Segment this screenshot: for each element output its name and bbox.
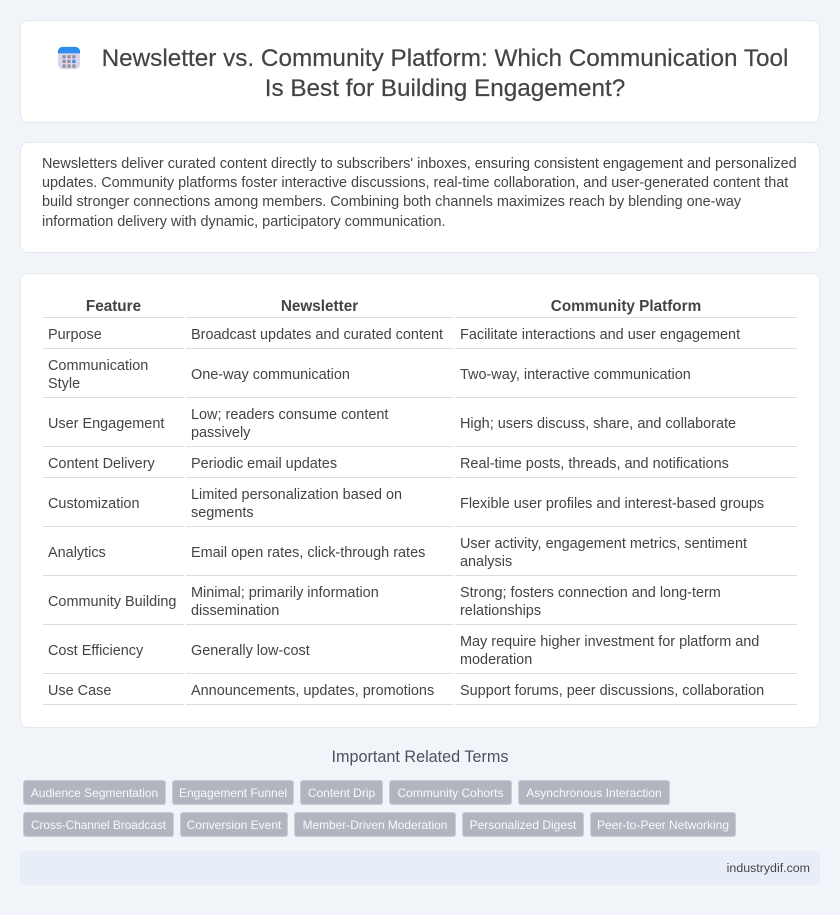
tag: Community Cohorts: [397, 786, 504, 800]
heading: related terms: Important Related Terms: [332, 748, 508, 766]
title: Is Best for Building Engagement?: [265, 75, 625, 102]
comparison table: Flexible user profiles and interest-based groups: [460, 496, 764, 512]
tag: Personalized Digest: [470, 818, 576, 832]
comparison table: Content Delivery: [48, 456, 155, 472]
tag: [23, 812, 174, 837]
tag: Member-Driven Moderation: [303, 818, 447, 832]
tag: Conversion Event: [187, 818, 281, 832]
comparison table: segments: [191, 505, 254, 521]
comparison table: User activity, engagement metrics, sentiment: [460, 536, 747, 552]
comparison table: [43, 298, 797, 705]
comparison table: Facilitate interactions and user engagement: [460, 327, 740, 343]
comparison table: Community Platform: [551, 298, 701, 315]
icon: calendar: [58, 46, 80, 70]
panel: title header: [20, 20, 820, 123]
tag: [300, 780, 383, 805]
comparison table: User Engagement: [48, 416, 164, 432]
comparison table: Limited personalization based on: [191, 487, 402, 503]
comparison table: Style: [48, 376, 80, 392]
tag: Engagement Funnel: [179, 786, 287, 800]
comparison table: Customization: [48, 496, 139, 512]
comparison table: Low; readers consume content: [191, 407, 388, 423]
comparison table: Purpose: [48, 327, 102, 343]
tag: Content Drip: [308, 786, 375, 800]
comparison table: Use Case: [48, 683, 111, 699]
footer text: industrydif.com: [727, 861, 810, 875]
panel: comparison table: [20, 273, 820, 728]
text block: introduction: Newsletters deliver curated content directly to subscribers' inboxes, ensuring consistent engagement and personalized: [42, 156, 797, 172]
comparison table: Community Building: [48, 594, 176, 610]
footer bar: [20, 851, 820, 885]
text block: introduction: [42, 156, 797, 230]
comparison table: One-way communication: [191, 367, 350, 383]
comparison table: Analytics: [48, 545, 106, 561]
tag: Asynchronous Interaction: [526, 786, 662, 800]
comparison table: dissemination: [191, 603, 279, 619]
tag: [180, 812, 288, 837]
comparison table: Cost Efficiency: [48, 643, 143, 659]
comparison table: May require higher investment for platform and: [460, 634, 759, 650]
comparison table: Communication: [48, 358, 148, 374]
comparison table: moderation: [460, 652, 532, 668]
text block: introduction: build stronger connections among members. Combining both channels maximizes reach by blending one-way: [42, 194, 741, 210]
comparison table: passively: [191, 425, 250, 441]
tag: [462, 812, 584, 837]
text block: introduction: updates. Community platforms foster interactive discussions, real-time collaboration, and user-generated content that: [42, 175, 788, 191]
tag: Audience Segmentation: [31, 786, 158, 800]
comparison table: Feature: [86, 298, 141, 315]
title: Newsletter vs. Community Platform: Which Communication Tool: [102, 45, 788, 72]
comparison table: analysis: [460, 554, 512, 570]
title: [102, 45, 788, 102]
comparison table: Newsletter: [281, 298, 358, 315]
tag: Cross-Channel Broadcast: [31, 818, 166, 832]
tag: [294, 812, 456, 837]
comparison table: Announcements, updates, promotions: [191, 683, 434, 699]
comparison table: Strong; fosters connection and long-term: [460, 585, 721, 601]
tag: [172, 780, 294, 805]
comparison table: relationships: [460, 603, 541, 619]
comparison table: Periodic email updates: [191, 456, 337, 472]
panel: introduction: [20, 142, 820, 253]
tag: [23, 780, 166, 805]
tag: [590, 812, 736, 837]
comparison table: Minimal; primarily information: [191, 585, 379, 601]
comparison table: Generally low-cost: [191, 643, 310, 659]
comparison table: Two-way, interactive communication: [460, 367, 691, 383]
comparison table: Support forums, peer discussions, collaboration: [460, 683, 764, 699]
tag: [389, 780, 512, 805]
tag group: related terms: [23, 780, 736, 837]
comparison table: Broadcast updates and curated content: [191, 327, 443, 343]
comparison table: Real-time posts, threads, and notifications: [460, 456, 729, 472]
comparison table: Email open rates, click-through rates: [191, 545, 425, 561]
comparison table: High; users discuss, share, and collaborate: [460, 416, 736, 432]
text block: introduction: information delivery with dynamic, participatory communication.: [42, 214, 446, 230]
tag: [518, 780, 670, 805]
tag: Peer-to-Peer Networking: [597, 818, 729, 832]
